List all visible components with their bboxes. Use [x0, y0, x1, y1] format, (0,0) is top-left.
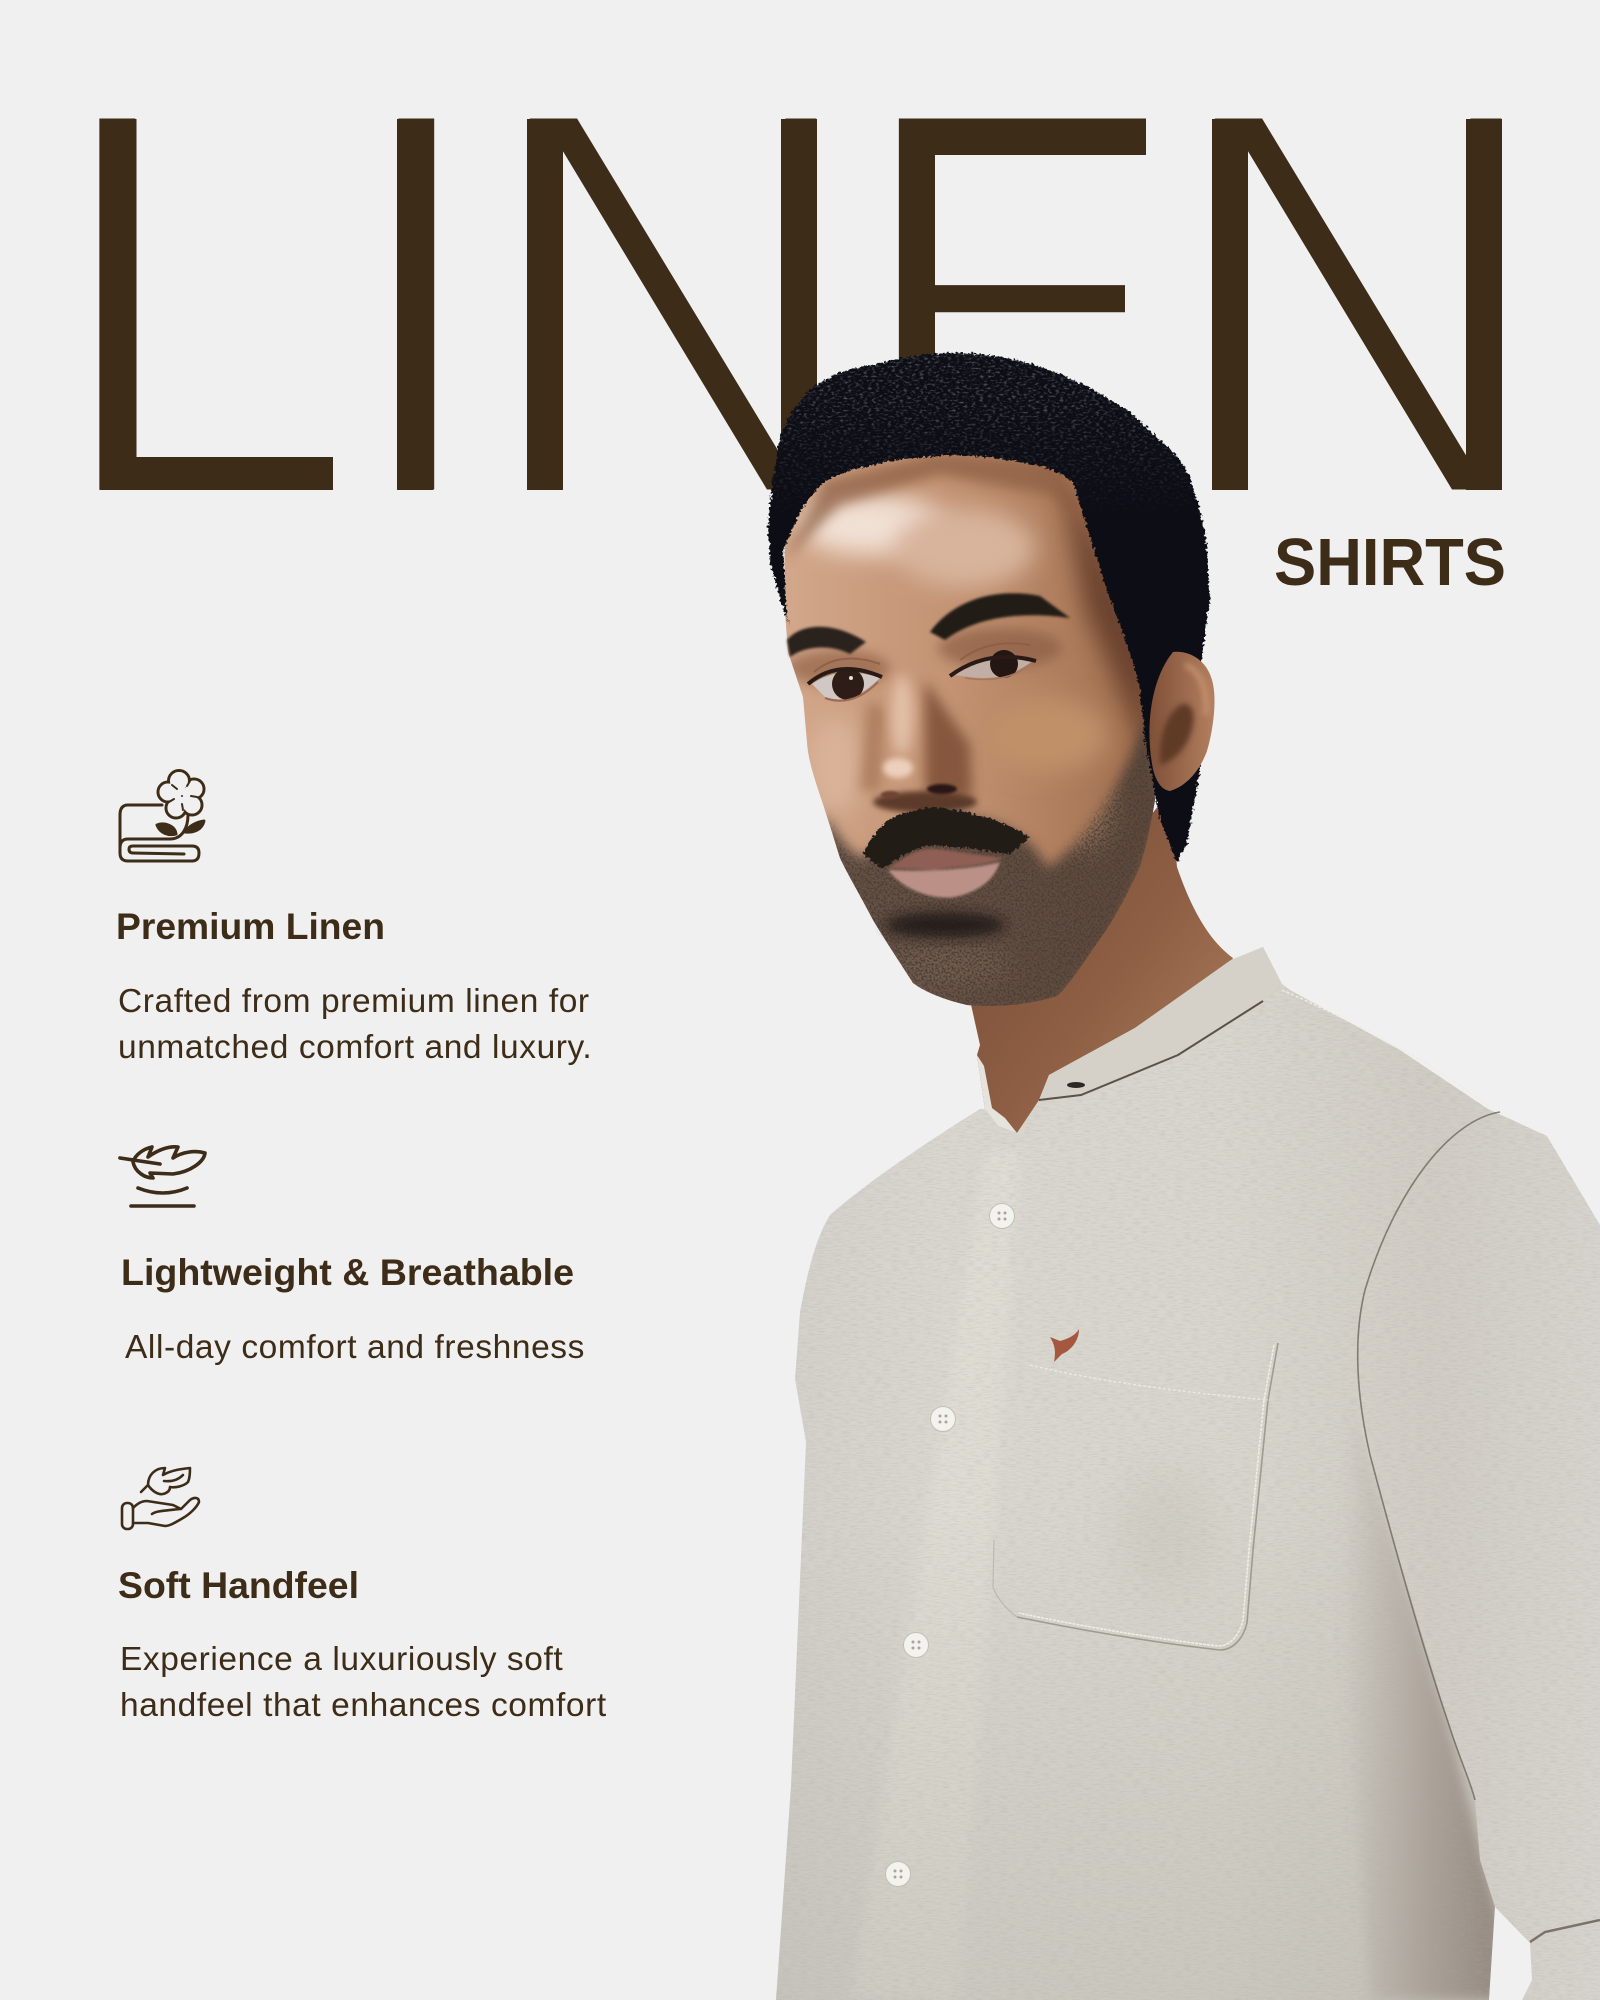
eyebrow left	[787, 627, 866, 657]
button 2	[930, 1406, 956, 1432]
eyebrow right	[930, 593, 1070, 640]
text: premium linen description: unmatched comfort and luxury.	[118, 1029, 592, 1066]
icon: hand with leaf	[122, 1468, 199, 1529]
title: LINEN: LINEN	[48, 0, 1552, 616]
collar stand	[1039, 947, 1282, 1100]
eye left	[808, 659, 882, 701]
button 1	[990, 1204, 1014, 1228]
ear	[1149, 652, 1215, 791]
cuff fold	[1530, 1920, 1600, 1942]
eye right	[950, 643, 1036, 679]
text: premium linen description: Crafted from premium linen for	[118, 983, 590, 1020]
shirt	[760, 940, 1600, 2000]
button 4	[886, 1862, 910, 1886]
face	[784, 454, 1155, 1006]
text: soft handfeel description: Experience a luxuriously soft	[120, 1641, 563, 1678]
lips	[888, 849, 1003, 898]
hair	[760, 345, 1220, 862]
heading: Premium Linen: Premium Linen	[116, 906, 385, 947]
heading: Soft Handfeel: Soft Handfeel	[118, 1565, 359, 1606]
button 3	[904, 1632, 928, 1658]
logo	[1050, 1329, 1079, 1362]
beard	[826, 720, 1155, 1006]
icon: feather	[120, 1147, 205, 1206]
heading: Lightweight & Breathable: Lightweight & Breathable	[121, 1252, 574, 1293]
collar inside band	[977, 1055, 1017, 1133]
model photo illustration	[760, 345, 1600, 2000]
subtitle: SHIRTS: SHIRTS	[1274, 525, 1506, 600]
shoulder stitch	[1282, 990, 1490, 1108]
text: lightweight description: All-day comfort and freshness	[125, 1329, 585, 1366]
pocket	[993, 1343, 1278, 1650]
collar buttonhole	[1067, 1082, 1085, 1088]
text: soft handfeel description: handfeel that enhances comfort	[120, 1687, 607, 1724]
soul patch	[885, 912, 1005, 938]
icon: towel with flower	[120, 770, 204, 861]
armhole seam	[1358, 1112, 1500, 1800]
moustache	[863, 807, 1030, 869]
back hair and neck	[970, 791, 1233, 1133]
